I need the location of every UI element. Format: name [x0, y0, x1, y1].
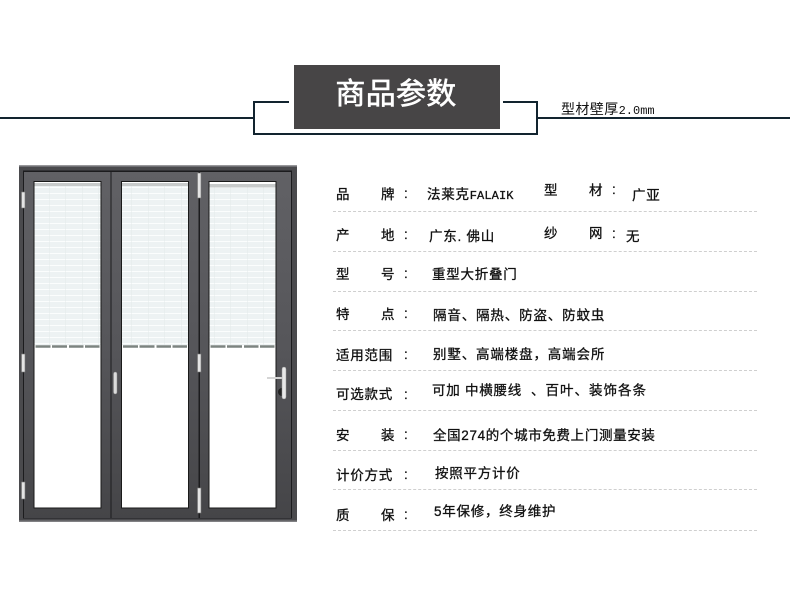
door leaf 2 [112, 172, 198, 518]
door lever handle [267, 367, 286, 399]
profile thickness note: 型材壁厚2.0mm [561, 99, 655, 119]
hinges [22, 173, 201, 513]
door illustration [19, 165, 297, 522]
row: 产地 / 纱网: : [404, 227, 409, 242]
row: 计价方式: 计价方式 [336, 468, 393, 483]
brand value: 法莱克FALAIK [427, 187, 514, 203]
row: 可选款式: 可加 [432, 383, 460, 398]
row: 可选款式: 可选款式 [336, 387, 393, 402]
door leaf 1 [24, 172, 110, 518]
row: 特点: : [404, 306, 409, 321]
outer frame [19, 165, 297, 522]
middle handle [114, 372, 117, 394]
origin value: 广东. 佛山 [429, 229, 495, 244]
row: 可选款式: : [404, 387, 409, 402]
row: 品牌 / 型材: 材 [589, 183, 603, 198]
material label: 型 [544, 183, 558, 198]
row: 产地 / 纱网: 产 [336, 228, 350, 243]
row: 适用范围 [333, 331, 757, 371]
row: 品牌 / 型材: : [612, 182, 617, 197]
row: 可选款式: 、百叶、装饰各条 [531, 383, 647, 398]
row: 特点: 点 [381, 307, 395, 322]
title: 商品参数: 商品参数 [335, 78, 457, 111]
row: 安装: : [404, 427, 409, 442]
row: 特点: 特 [336, 307, 350, 322]
row: 产地 / 纱网: 无 [626, 229, 640, 244]
row: 品牌 / 型材: 牌 [381, 187, 395, 202]
row: 可选款式 [333, 371, 757, 411]
row: 可选款式: 中横腰线 [465, 383, 522, 398]
row: 产地 / 纱网: 地 [381, 228, 395, 243]
row: 适用范围: 别墅、高端楼盘，高端会所 [433, 347, 605, 362]
row: 产地 / 纱网: : [612, 226, 617, 241]
row: 品牌 / 型材: : [404, 186, 409, 201]
row: 计价方式: 按照平方计价 [435, 466, 520, 481]
row: 型号 [333, 252, 757, 292]
row: 质保: : [404, 507, 409, 522]
row: 安装: 全国274的个城市免费上门测量安装 [433, 428, 656, 443]
row: 型号: 型 [336, 267, 350, 282]
row: 安装 [333, 411, 757, 451]
row: 质保: 5年保修，终身维护 [434, 504, 556, 519]
row: 型号: : [404, 266, 409, 281]
row: 型号: 号 [381, 267, 395, 282]
row: 适用范围: : [404, 347, 409, 362]
row: 产地 / 纱网 [333, 212, 757, 252]
screen label: 纱 [544, 226, 558, 241]
row: 品牌 / 型材: 广亚 [632, 188, 660, 203]
row: 安装: 装 [381, 428, 395, 443]
row: 品牌 / 型材: 品 [336, 187, 350, 202]
row: 质保: 质 [336, 508, 350, 523]
row: 产地 / 纱网: 网 [589, 226, 603, 241]
row: 特点 [333, 292, 757, 331]
row: 特点: 隔音、隔热、防盗、防蚊虫 [433, 308, 605, 323]
row: 质保 [333, 490, 757, 531]
door leaf 3 [200, 172, 291, 518]
row: 安装: 安 [336, 428, 350, 443]
row: 计价方式: : [404, 467, 409, 482]
row: 计价方式 [333, 451, 757, 490]
header rule and bracket [0, 101, 790, 135]
row: 质保: 保 [381, 508, 395, 523]
row: 品牌 / 型材 [333, 172, 757, 212]
row: 型号: 重型大折叠门 [432, 267, 518, 282]
row: 适用范围: 适用范围 [336, 348, 393, 363]
title: 商品参数 [294, 65, 500, 129]
